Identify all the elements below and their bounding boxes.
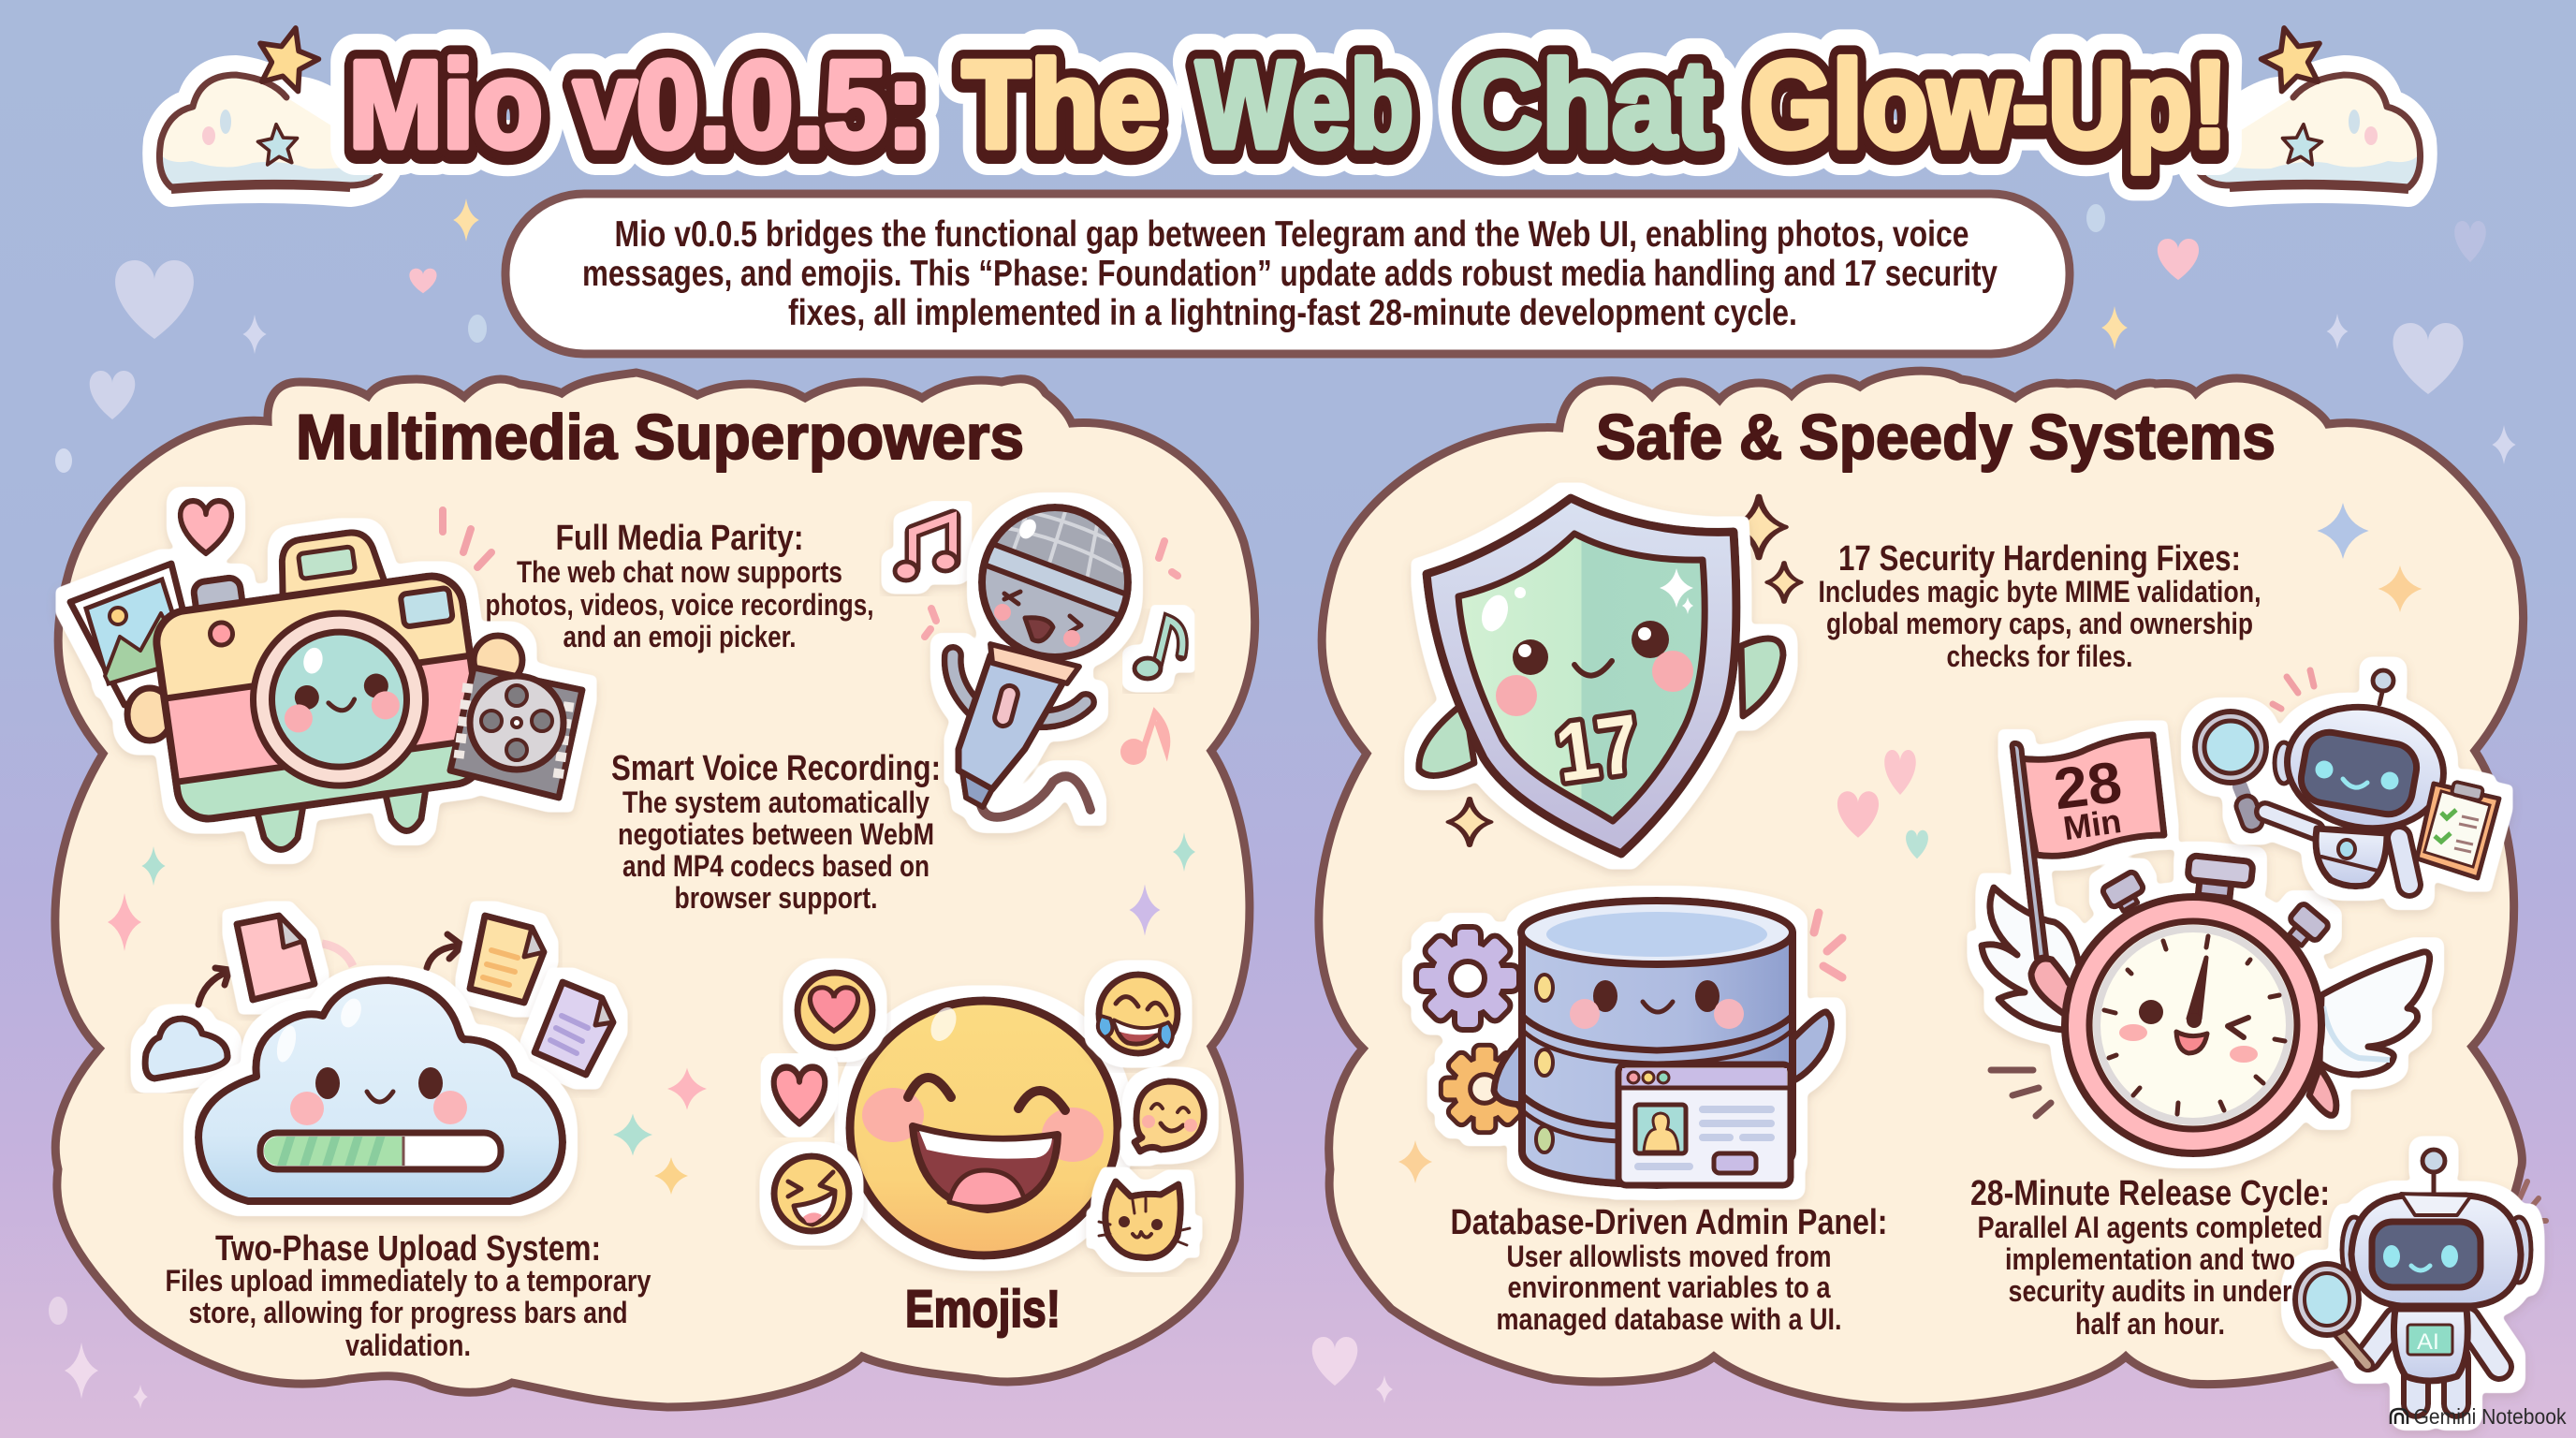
foot and hand [2309,1067,2336,1115]
icon: purple gear [1419,930,1516,1027]
intro text box: messages, and emojis. This “Phase: Foundation” update adds robust media handling and 17 security [582,254,1998,294]
robot arms [2368,1320,2499,1367]
icon: database cylinder [1521,901,1793,1185]
title: Chat [1459,39,1714,177]
title: Mio v0.0.5: [348,39,925,177]
title: Mio v0.0.5: [348,36,925,173]
icon: stopwatch body [2065,897,2321,1153]
title: The [962,39,1161,177]
icon: main cloud [198,980,563,1201]
title: Web [1196,36,1413,173]
icon: winged stopwatch with flag [1982,735,2430,1153]
text: 28-Minute Release Cycle: 28-Minute Release Cycle: [1970,1174,2330,1213]
icon: teal music note [1134,620,1182,679]
title: The [962,36,1161,173]
progress bar [260,1133,501,1169]
text: 28-Minute Release Cycle: security audits in under [2009,1274,2291,1308]
icon: flag [2012,735,2164,959]
text: 17 Security Hardening Fixes: global memory caps, and ownership [1826,607,2253,640]
icon: small cloud [145,1019,227,1078]
text: Smart Voice Recording: Smart Voice Recording: [611,749,941,788]
title: Glow-Up! [1749,39,2228,177]
text: Full Media Parity: photos, videos, voice recordings, [485,588,874,622]
text: Smart Voice Recording: browser support. [674,881,878,915]
icon: emoji cluster [774,973,1204,1258]
icon: gold sparkles [1449,496,1801,845]
icon: smile bubble [1134,1081,1204,1152]
icon: pink document [237,916,315,1000]
text: Smart Voice Recording: and MP4 codecs based on [622,849,929,883]
text: Full Media Parity [485,519,874,653]
text: Database-Driven Admin Panel [1451,1203,1887,1336]
title [348,36,2228,177]
icon: flag: 28 [2051,750,2125,822]
intro text box: fixes, all implemented in a lightning-fast 28-minute development cycle. [788,293,1797,333]
robot body [2316,829,2387,887]
icon: heart above camera [181,501,231,553]
title decoration: right cloud [2194,21,2422,191]
text: 28-Minute Release Cycle: Parallel AI agents completed [1977,1211,2323,1244]
text: 28-Minute Release Cycle: implementation and two [2005,1242,2295,1276]
icon: microphone [953,506,1137,817]
text: 17 Security Hardening Fixes: checks for files. [1947,639,2132,673]
text: 28-Minute Release Cycle: half an hour. [2075,1307,2225,1341]
text: Two-Phase Upload System: Files upload immediately to a temporary [165,1264,651,1298]
robot body [2393,1309,2467,1381]
title: Web [1196,39,1413,177]
title: Mio v0.0.5: [348,36,925,173]
text: Database-Driven Admin Panel: managed database with a UI. [1496,1302,1842,1336]
icon: AI robot with magnifier [2295,1150,2546,1404]
robot head [2277,695,2453,841]
title: Glow-Up! [1749,36,2228,173]
magnifier [2240,786,2249,810]
icon: cloud upload with progress bar and documents [145,916,613,1201]
icon: squinting emoji [774,1156,849,1231]
title: Mio v0.0.5: [348,36,925,173]
decorative sparkles and hearts [1398,503,2422,1183]
title: Web [1196,36,1413,173]
robot ears [2342,1217,2366,1283]
text: Smart Voice Recording: negotiates between WebM [618,817,934,851]
icon: orange gear [1443,1048,1526,1130]
title: Chat [1459,36,1714,173]
database arms [1793,1012,1832,1081]
icon: right wing [2320,952,2430,1075]
icon: photo print [70,564,201,705]
arrows [198,934,462,1005]
icon: small heart [774,1067,825,1123]
text: Full Media Parity: Full Media Parity: [556,519,803,558]
watermark: Gemini Notebook: Gemini Notebook [2413,1404,2567,1429]
text: Smart Voice Recording: The system automatically [622,785,929,819]
panel heading: Multimedia Superpowers [296,402,1024,473]
clipboard [2417,784,2499,878]
panel heading: Safe & Speedy Systems [1596,402,2276,473]
panel: Safe & Speedy Systems [1319,371,2546,1407]
text: Two-Phase Upload System: Two-Phase Upload System: [215,1229,601,1269]
intro text box: Mio v0.0.5 bridges the functional gap between Telegram and the Web UI, enabling photos, voice [614,214,1969,255]
text: 28-Minute Release Cycle [1970,1174,2330,1341]
title: Glow-Up! [1749,36,2228,173]
title: Chat [1459,36,1714,173]
title: Web [1196,36,1413,173]
icon: yellow document [470,916,544,1003]
robot legs [2416,1357,2456,1404]
icon: camera with photo and film reel [70,501,582,850]
antenna [2379,688,2383,704]
robot magnifier [2338,1331,2367,1365]
icon: left wing [1982,888,2083,1030]
icon: robot with magnifier and clipboard [2195,670,2499,887]
title: The [962,36,1161,173]
robot head [2351,1196,2521,1306]
text: 17 Security Hardening Fixes [1818,539,2261,673]
text: Two-Phase Upload System: validation. [345,1328,471,1362]
icon: database with admin panel and gears [1419,901,1832,1185]
title: Glow-Up! [1749,36,2228,173]
camera body [145,519,488,823]
text: Full Media Parity: and an emoji picker. [564,620,796,653]
icon: cat emoji [1099,1181,1190,1258]
icon: film reel [450,668,582,798]
text: Database-Driven Admin Panel: Database-Driven Admin Panel: [1451,1203,1887,1242]
number 17 on shield: 17 [1550,697,1645,800]
text: Database-Driven Admin Panel: User allowlists moved from [1507,1240,1831,1273]
label: Emojis: Emojis! [905,1279,1061,1338]
text: Two-Phase Upload System [165,1229,651,1362]
icon: purple document [534,982,613,1075]
icon: stopwatch buttons [2101,856,2330,946]
icon: admin panel window [1618,1064,1791,1185]
title decoration: left cloud [158,21,386,191]
icon: crying-laughing emoji [1098,975,1178,1053]
text: Database-Driven Admin Panel: environment variables to a [1507,1270,1831,1304]
text: Smart Voice Recording [611,749,941,915]
text: 17 Security Hardening Fixes: 17 Security Hardening Fixes: [1838,539,2241,579]
camera arms and legs [127,636,522,850]
title: The [962,36,1161,173]
text: Full Media Parity: The web chat now supports [517,555,842,589]
speed lines [1991,1070,2051,1116]
icon: AI robot with magnifier: AI [2417,1329,2439,1355]
icon: flag: Min [2061,801,2124,847]
icon: heart coin [798,973,872,1048]
text: 17 Security Hardening Fixes: Includes magic byte MIME validation, [1818,575,2261,609]
title: Chat [1459,36,1714,173]
decorative sparkles [108,510,1195,1195]
intro text box [505,194,2070,354]
panel: Multimedia Superpowers [55,373,1255,1407]
icon: faint note [1142,713,1167,754]
icon: microphone with music notes [895,506,1182,817]
icon: main smiling emoji [850,1001,1118,1255]
icon: shield with number 17 [1419,496,1801,854]
text: Two-Phase Upload System: store, allowing for progress bars and [189,1296,627,1329]
icon: pink music note [895,517,957,580]
